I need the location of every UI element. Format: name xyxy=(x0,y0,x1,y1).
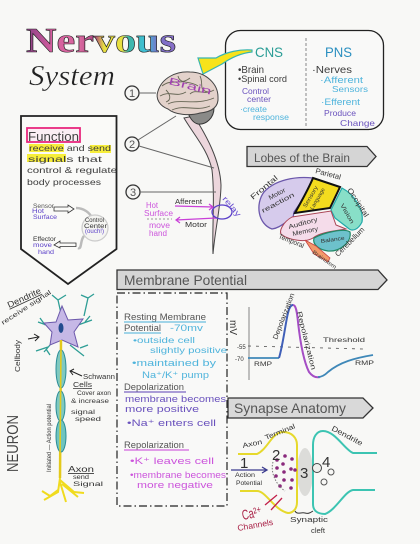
callout 3: 3 xyxy=(130,187,136,199)
panel: neuron: Initiated — Action potential xyxy=(47,404,53,472)
reflex arc diagram: Surface xyxy=(144,209,174,218)
reflex arc diagram xyxy=(144,195,243,238)
axon xyxy=(60,340,61,478)
curve: rmp xyxy=(248,357,279,359)
dendrites xyxy=(36,294,94,356)
flow diagram: sensor control effector: Sensor xyxy=(33,204,54,210)
labels: numbered callouts xyxy=(125,86,216,199)
diagram: brain lobes: Occipital xyxy=(345,186,371,219)
diagram: brain lobes xyxy=(249,166,371,271)
Schwann cells xyxy=(56,350,66,388)
diagram: brain lobes: Brainstem xyxy=(311,250,338,271)
flow diagram: sensor control effector: Surface xyxy=(33,215,58,221)
panel: neuron: send xyxy=(73,474,89,481)
title xyxy=(26,21,176,92)
flow diagram: sensor control effector: Hot xyxy=(32,209,44,215)
diagram: synapse: Potential xyxy=(236,481,262,487)
diagram: brain lobes: Balance xyxy=(320,236,345,245)
panel: neuron: Cover axon xyxy=(77,391,111,397)
cell body xyxy=(44,306,83,347)
diagram: brain lobes: Auditory xyxy=(288,216,319,231)
diagram: synapse xyxy=(231,423,377,535)
section: repolarization: •membrane becomes xyxy=(130,470,227,480)
reflex arc diagram: Hot xyxy=(146,201,159,210)
chart: action potential: -70 xyxy=(235,357,244,363)
panel: neuron: Dendrite xyxy=(6,285,43,310)
curve: recovery xyxy=(318,355,373,377)
subtitle: System xyxy=(29,60,115,92)
panel: CNS and PNS xyxy=(226,30,384,130)
panel: neuron: Cellbody xyxy=(13,340,22,372)
diagram: synapse: Action xyxy=(235,473,255,479)
axon terminal outline xyxy=(238,432,297,513)
panel: neuron xyxy=(0,285,115,502)
banner: membrane potential xyxy=(117,270,387,290)
arrow: highlighter from CNS to brain xyxy=(198,50,252,74)
heading: function: Function xyxy=(28,129,79,144)
cerebrum xyxy=(157,72,218,115)
diagram: brain lobes: Vision xyxy=(338,203,354,225)
section: depolarization: membrane becomes xyxy=(125,394,226,405)
panel: neuron: Signal xyxy=(73,481,104,488)
PNS column: ·Afferent xyxy=(320,75,364,85)
banner: lobes of the brain: Lobes of the Brain xyxy=(254,151,350,165)
section: resting potential xyxy=(124,312,227,381)
diagram: synapse: 3 xyxy=(300,465,308,482)
chart: action potential: -55 xyxy=(237,345,246,351)
diagram: brain lobes: Sensory xyxy=(303,185,320,209)
occipital lobe xyxy=(331,188,362,230)
text block: function: body processes xyxy=(27,177,101,187)
panel: neuron: Axon xyxy=(68,464,94,474)
diagram: synapse: cleft xyxy=(311,526,326,535)
panel: neuron: & increase xyxy=(71,399,110,405)
diagram: synapse: 4 xyxy=(322,454,330,471)
diagram: brain lobes: Parietal xyxy=(314,166,342,182)
callout 2: 2 xyxy=(129,139,135,151)
diagram: brain lobes: Frontal xyxy=(249,173,280,202)
chart: action potential: RMP xyxy=(355,361,374,367)
diagram: brain lobes: Memory xyxy=(292,226,320,238)
section: repolarization: Repolarization xyxy=(124,440,184,450)
brainstem xyxy=(305,240,330,262)
diagram: brain lobes: reaction xyxy=(261,191,296,215)
section: resting potential: Na⁺/K⁺ pump xyxy=(142,370,209,381)
diagram: brain lobes: Temporal xyxy=(277,233,305,250)
diagram: synapse: 1 xyxy=(240,455,248,472)
flow diagram: sensor control effector: Center xyxy=(84,224,107,230)
section: depolarization xyxy=(124,382,226,429)
flow diagram: sensor control effector: Effector xyxy=(33,237,56,243)
reflex arc diagram: move xyxy=(149,221,171,230)
chart: action potential: RMP xyxy=(254,362,272,368)
PNS column: ·Efferent xyxy=(321,97,361,107)
flow diagram: sensor control effector: move xyxy=(33,243,53,249)
synaptic cleft cloud xyxy=(297,448,313,496)
text block: function: signals that xyxy=(28,154,103,164)
chart: action potential xyxy=(227,292,374,380)
parietal lobe xyxy=(295,178,340,213)
reflex arc diagram: relay xyxy=(220,195,243,219)
banner: lobes of the brain xyxy=(247,146,376,166)
text block: function: control & regulate xyxy=(27,165,117,175)
calcium channels: Channels xyxy=(237,517,274,533)
cerebellum xyxy=(314,230,350,251)
flow diagram: sensor control effector: (ouch!) xyxy=(85,229,104,235)
section: repolarization: more negative xyxy=(137,480,213,490)
diagram: synapse: Axon xyxy=(242,439,263,450)
panel: neuron: signal xyxy=(71,409,96,416)
text block: function: receive and send xyxy=(29,143,111,153)
chart: action potential: mV xyxy=(227,320,238,335)
section: resting potential: Resting Membrane xyxy=(124,312,206,322)
CNS column: Control xyxy=(242,86,269,96)
chart: action potential: Threshold xyxy=(323,337,366,344)
action potential arrow xyxy=(231,467,267,473)
CNS column: •Spinal cord xyxy=(238,74,287,84)
icon: brain with spinal cord xyxy=(157,72,221,254)
PNS column: Sensors xyxy=(332,84,368,94)
axon terminals xyxy=(42,478,84,502)
CNS column xyxy=(238,44,289,122)
banner: synapse anatomy: Synapse Anatomy xyxy=(234,400,346,416)
CNS column: CNS xyxy=(255,44,283,60)
chart: action potential: Depolarization xyxy=(272,292,296,341)
CNS column: response xyxy=(253,112,289,122)
curve: depolarization xyxy=(279,305,293,358)
PNS column: ·Nerves xyxy=(312,65,352,76)
callout 1: 1 xyxy=(129,88,135,100)
banner: synapse anatomy xyxy=(228,398,373,418)
panel: neuron: Schwann xyxy=(83,374,115,381)
PNS column: Produce xyxy=(324,108,356,118)
curve: repolarization xyxy=(293,305,320,377)
section: resting potential: Potential xyxy=(124,323,161,333)
diagram: brain lobes: Language xyxy=(310,187,327,211)
icon: brain with spinal cord: Brain xyxy=(167,76,213,98)
diagram: synapse: 2 xyxy=(272,447,280,464)
frontal lobe xyxy=(259,178,313,229)
diagram: synapse: Synaptic xyxy=(290,515,328,524)
flow diagram: sensor control effector xyxy=(32,204,108,256)
cerebellum xyxy=(188,108,214,124)
panel: neuron: receive signal xyxy=(0,289,53,327)
neurotransmitter vesicles xyxy=(274,454,297,490)
section: depolarization: Depolarization xyxy=(124,382,184,392)
panel: neuron: speed xyxy=(75,416,102,423)
diagram: synapse: Dendrite xyxy=(330,424,364,448)
diagram: synapse: Terminal xyxy=(264,423,297,442)
section: repolarization: •K⁺ leaves cell xyxy=(130,456,214,467)
temporal lobe xyxy=(281,211,346,241)
text block: function xyxy=(27,143,117,187)
banner: membrane potential: Membrane Potential xyxy=(124,272,247,288)
section: resting potential: -70mv xyxy=(170,323,204,333)
reflex arc diagram: hand xyxy=(149,229,167,238)
PNS column: Change xyxy=(340,118,375,128)
section: depolarization: more positive xyxy=(125,404,199,415)
reflex arc diagram: Motor xyxy=(185,222,208,229)
spinal cord xyxy=(184,116,221,254)
panel: membrane notes xyxy=(117,293,227,506)
flow diagram: sensor control effector: Control xyxy=(85,218,104,224)
reflex arc diagram: Afferent xyxy=(175,199,202,206)
calcium channels: Ca²⁺ xyxy=(240,503,263,523)
CNS column: center xyxy=(247,94,271,104)
PNS column xyxy=(312,44,375,128)
section: repolarization xyxy=(124,440,227,490)
section: depolarization: •Na⁺ enters cell xyxy=(127,418,216,429)
receptor xyxy=(312,464,322,472)
calcium channels xyxy=(237,495,282,533)
neuron label: NEURON xyxy=(5,415,22,472)
CNS column: ·create xyxy=(240,104,267,114)
section: resting potential: •outside cell xyxy=(133,335,195,345)
diagram: brain lobes: Motor xyxy=(268,187,288,202)
CNS column: •Brain xyxy=(238,64,264,76)
chart: action potential: Repolarization xyxy=(295,311,316,371)
diagram: brain lobes: Cerebellum xyxy=(333,225,366,258)
dendrite outline xyxy=(313,431,377,514)
PNS column: PNS xyxy=(325,44,352,60)
panel: function xyxy=(21,116,117,284)
section: resting potential: slightly positive xyxy=(150,345,227,355)
panel: neuron: Cells xyxy=(73,380,92,389)
flow diagram: sensor control effector: hand xyxy=(38,250,54,256)
section: resting potential: •maintained by xyxy=(132,358,216,369)
title: Nervous xyxy=(26,21,176,60)
synaptic cleft brace xyxy=(295,511,313,513)
